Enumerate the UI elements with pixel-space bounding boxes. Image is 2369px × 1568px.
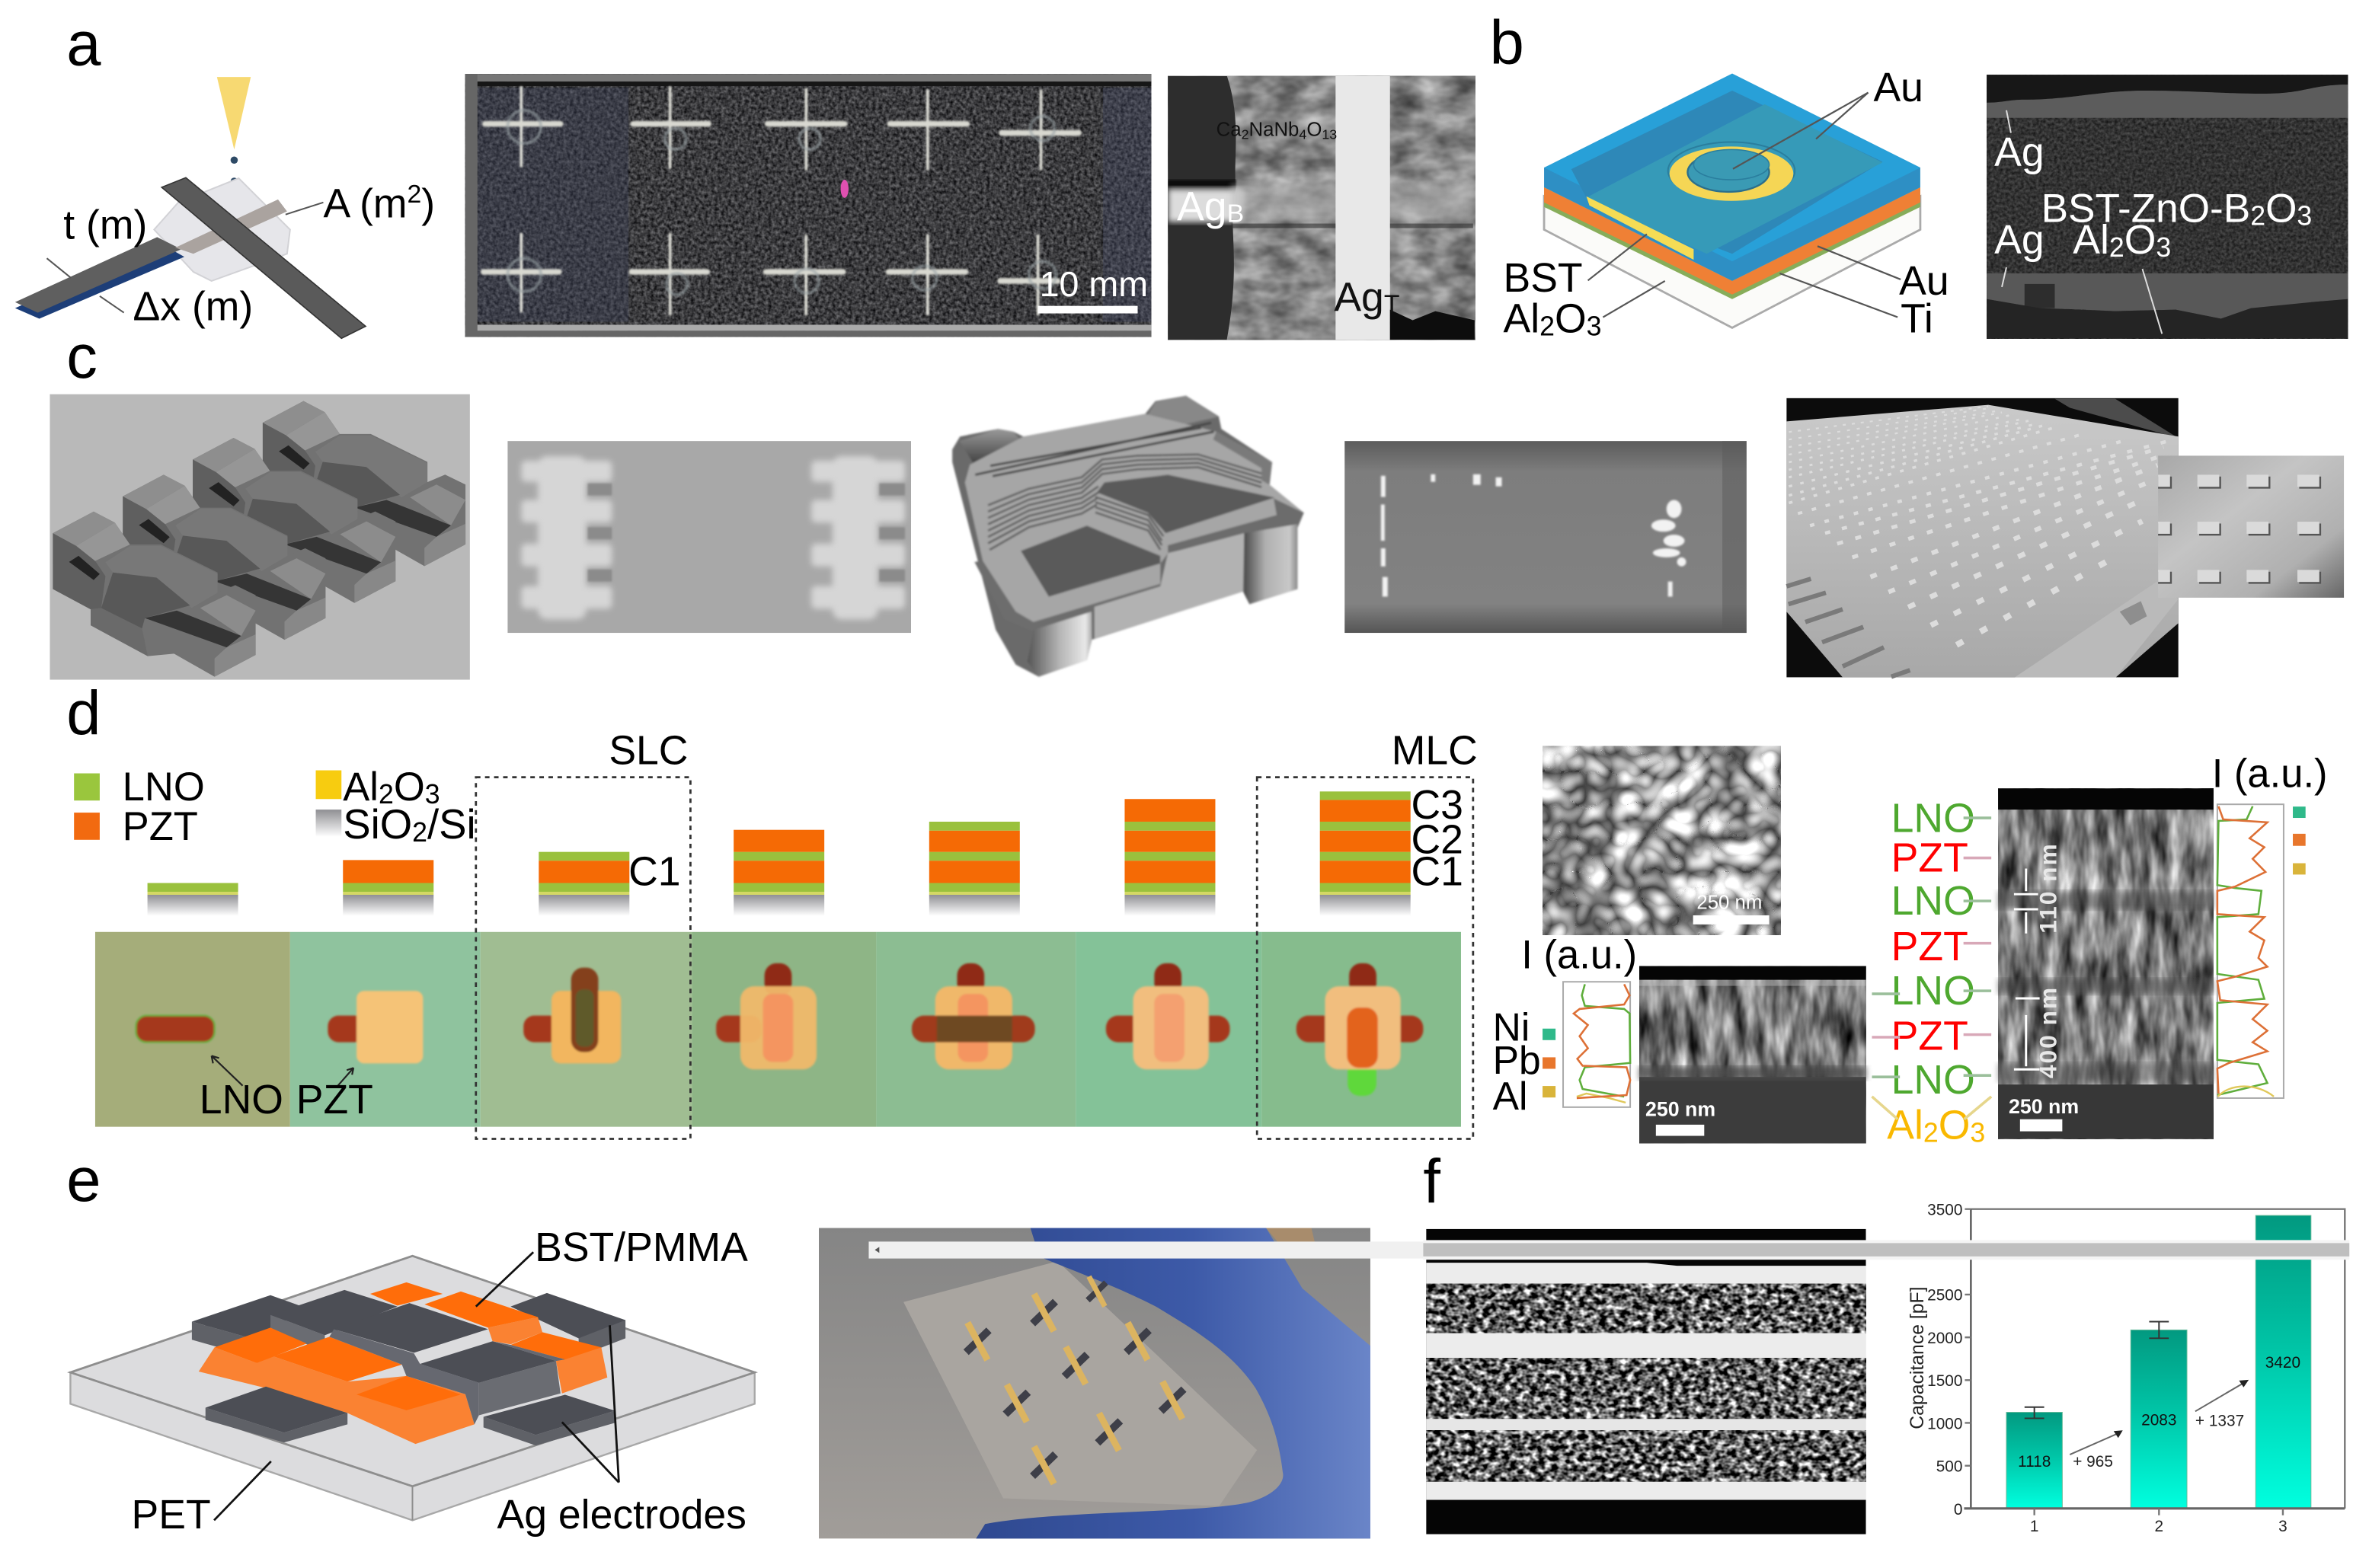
front wall [1095, 533, 1244, 638]
yellow BST strip [1587, 196, 1693, 260]
panel label d: d [66, 679, 101, 748]
layer labels column: PZT [1891, 925, 1968, 969]
x axis tick labels: 3 [2278, 1518, 2287, 1535]
substrate [1544, 196, 1920, 327]
label Al2O3: Al [2073, 218, 2109, 263]
y axis tick labels [1927, 1202, 1962, 1519]
legend swatches right [2293, 806, 2306, 874]
SEM: SLC cross section [1639, 966, 1866, 1143]
bar value labels: 2083 [2141, 1411, 2176, 1429]
label delta x: Δx (m) [133, 284, 253, 329]
legend: SiO [343, 801, 412, 848]
label Ca2NaNb4O13: 13 [1322, 126, 1337, 142]
upper electrode strip [161, 177, 366, 338]
inset close-up [2148, 455, 2344, 598]
legend: /Si [427, 801, 476, 848]
scale bar [1693, 915, 1770, 925]
center electrode [329, 1303, 565, 1424]
lower terminals [1244, 524, 1297, 604]
label Ca2NaNb4O13: NaNb [1249, 120, 1299, 141]
x axis tick labels: 1 [2030, 1518, 2038, 1535]
scale text: 250 nm [1645, 1098, 1715, 1121]
layer labels column [1887, 796, 1985, 1148]
scrollbar overlay [868, 1240, 2349, 1260]
SEM: PZT grains top view [1543, 746, 1781, 935]
legend: Al [343, 765, 379, 810]
device 5 [912, 963, 1035, 1069]
layer labels C3 C2 C1: C3 [1411, 783, 1463, 828]
label PZT: PZT [296, 1078, 373, 1123]
panel c: device photo [1344, 441, 1747, 633]
magenta spot [841, 180, 849, 198]
SLC dashed box [476, 778, 690, 1139]
label Al2O3: O [2124, 218, 2156, 263]
panel label a: a [66, 9, 101, 78]
device 3 [523, 968, 621, 1063]
label Al2O3: 3 [1587, 311, 1602, 341]
layer stack 1 [148, 883, 238, 916]
label BST/PMMA: BST/PMMA [535, 1225, 748, 1270]
label AgB: B [1227, 200, 1244, 228]
label 110 nm: 110 nm [2034, 842, 2061, 934]
arrow PZT [337, 1068, 353, 1086]
connector dashes [1872, 818, 1991, 1119]
layer labels column: PZT [1891, 835, 1968, 880]
y axis tick labels: 2000 [1927, 1330, 1962, 1347]
panel a: laser schematic [15, 77, 435, 338]
label Ag lower: Ag [1994, 218, 2045, 263]
dark electrode floors [1021, 525, 1160, 596]
panel label e: e [66, 1145, 101, 1215]
label Ca2NaNb4O13: 4 [1299, 126, 1306, 142]
label AgT: T [1384, 290, 1399, 319]
SEM: three-layer cross section [1426, 1229, 1866, 1534]
ring [1668, 142, 1795, 200]
back electrodes [192, 1290, 625, 1359]
SEM: Ca2NaNb4O13 cross section [1168, 75, 1475, 340]
MLC dashed box [1257, 778, 1473, 1139]
label BST: BST [1504, 256, 1583, 301]
y axis tick labels: 1000 [1927, 1415, 1962, 1432]
SEM: MLC cross section [1998, 788, 2214, 1139]
layer labels C1: C1 [628, 849, 681, 894]
label AgB: Ag [1177, 185, 1227, 230]
panel c: printed comb electrode photo [507, 441, 911, 633]
label Ca2NaNb4O13: O [1306, 120, 1322, 141]
label MLC: MLC [1392, 729, 1478, 774]
label I (a.u.) left: I (a.u.) [1521, 932, 1637, 977]
device 6 [1106, 963, 1230, 1069]
label t: t (m) [63, 203, 147, 247]
orange top pads [215, 1327, 601, 1410]
panel c: MLCC cutaway render [952, 396, 1304, 677]
photo: printed capacitor array [465, 74, 1151, 337]
icon: laser cone [217, 77, 251, 149]
legend: O [394, 765, 425, 810]
element labels Ni Pb Al [1493, 1005, 1541, 1118]
y axis tick labels: 500 [1936, 1458, 1962, 1476]
legend: 2 [412, 817, 427, 848]
layer stack 7 [1320, 791, 1411, 916]
label BST-ZnO-B2O3: 2 [2250, 201, 2265, 232]
label 400 nm: 400 nm [2034, 986, 2061, 1078]
panel label b: b [1490, 8, 1524, 77]
increase labels: + 1337 [2195, 1412, 2244, 1429]
layer labels column: 2 [1923, 1117, 1939, 1148]
label PET: PET [132, 1493, 211, 1538]
label Al2O3: 3 [2156, 232, 2171, 263]
device 2 [328, 991, 423, 1063]
layer labels C3 C2 C1: C1 [1411, 849, 1463, 894]
label Au lower: Au [1899, 259, 1949, 304]
layer labels column: LNO [1891, 879, 1975, 924]
pointer lines [46, 203, 323, 313]
pointer lines [2002, 110, 2162, 334]
label Ti: Ti [1901, 296, 1933, 341]
device 4 [716, 963, 817, 1069]
scale bar [1038, 306, 1138, 314]
error bars [2025, 1321, 2169, 1418]
bar value labels: 3420 [2265, 1354, 2300, 1372]
panel c: wafer photo [1786, 398, 2344, 677]
arrow 2 [2195, 1380, 2249, 1411]
legend: PZT [123, 804, 198, 849]
label A: A (m [323, 182, 408, 227]
layer labels column: O [1939, 1103, 1970, 1148]
layer stack 3 [539, 852, 629, 916]
EDS profile right [2217, 804, 2284, 1098]
clear substrate block [154, 178, 290, 281]
y axis tick labels: 0 [1954, 1501, 1962, 1519]
dots grid [1789, 407, 2168, 645]
legend: 3 [425, 779, 440, 810]
y axis tick labels: 1500 [1927, 1372, 1962, 1390]
label A: ) [421, 182, 435, 227]
layer stack 5 [929, 822, 1020, 916]
label Al2O3: Al [1504, 296, 1539, 341]
mid layer [175, 200, 287, 254]
flexible sheet [903, 1261, 1257, 1506]
layer labels column: PZT [1891, 1014, 1968, 1059]
bars [2006, 1215, 2311, 1509]
layer labels column: LNO [1891, 1058, 1975, 1103]
label LNO: LNO [200, 1078, 283, 1123]
electrode layers [988, 455, 1261, 550]
legend: LNO [123, 765, 205, 810]
panel c: 3D electrode render [50, 394, 470, 680]
panel e: flexible capacitor schematic [70, 1225, 755, 1538]
y axis tick labels: 2500 [1927, 1287, 1962, 1305]
layer stack 4 [734, 830, 824, 916]
label Ca2NaNb4O13: 2 [1242, 126, 1249, 142]
pointer lines [214, 1252, 619, 1520]
label AgT: Ag [1334, 276, 1384, 321]
axes [1964, 1209, 2345, 1515]
bar value labels [2018, 1354, 2300, 1471]
element labels Ni Pb Al: Ni [1493, 1005, 1530, 1049]
label BST-ZnO-B2O3: 3 [2297, 201, 2312, 232]
legend [74, 771, 473, 841]
layer labels column: LNO [1891, 796, 1975, 841]
optical micrographs strip [95, 932, 1461, 1127]
element labels Ni Pb Al: Al [1493, 1074, 1527, 1118]
increase labels: + 965 [2073, 1453, 2113, 1471]
PET substrate [70, 1372, 755, 1520]
increase labels [2073, 1412, 2244, 1471]
layer stack 2 [343, 860, 433, 916]
glove [976, 1228, 1370, 1538]
label Al2O3: 2 [2109, 232, 2124, 263]
device 1 [136, 1016, 215, 1043]
label BST-ZnO-B2O3: BST-ZnO-B [2041, 187, 2250, 232]
layer labels column: LNO [1891, 969, 1975, 1014]
pointer lines [1588, 93, 1901, 318]
blue top plate [1544, 74, 1920, 281]
panel label c: c [66, 322, 98, 391]
scale bar [1656, 1125, 1704, 1136]
edge slots [1786, 579, 1910, 677]
legend: 2 [379, 779, 394, 810]
SEM: BST-ZnO-B2O3 cross section [1987, 75, 2348, 339]
orange side walls [199, 1347, 475, 1444]
label I (a.u.) right: I (a.u.) [2212, 751, 2328, 796]
bar chart: capacitance [1907, 1202, 2345, 1535]
label Al2O3: 2 [1539, 311, 1555, 341]
right electrode [420, 1341, 561, 1415]
EDS profile left [1563, 982, 1630, 1107]
layer stack 6 [1124, 799, 1215, 916]
lower electrode strip [15, 237, 184, 319]
label Ag: Ag [1994, 130, 2045, 175]
layer labels C3 C2 C1: C2 [1411, 818, 1463, 863]
y axis title: Capacitance [pF] [1907, 1286, 1928, 1429]
panel label f: f [1423, 1147, 1440, 1216]
front electrodes [206, 1387, 615, 1445]
scale text: 250 nm [2009, 1095, 2079, 1118]
layer labels C3 C2 C1 [1411, 783, 1463, 894]
element labels Ni Pb Al: Pb [1493, 1038, 1541, 1082]
scale bar [2020, 1119, 2062, 1132]
panel b: device schematic [1504, 65, 1949, 341]
arrow LNO [212, 1055, 243, 1086]
label Ca2NaNb4O13: Ca [1216, 120, 1242, 141]
device 7 [1296, 963, 1423, 1096]
orange layer [1544, 187, 1920, 295]
label Al2O3: O [1555, 296, 1587, 341]
scale text: 250 nm [1696, 893, 1762, 914]
y axis tick labels: 3500 [1927, 1202, 1962, 1219]
chips [964, 1276, 1187, 1485]
label SLC: SLC [609, 729, 688, 774]
legend swatches left [1543, 1029, 1555, 1097]
layer labels column: 3 [1970, 1117, 1985, 1148]
dimension arrows [2014, 868, 2040, 1069]
label Au top: Au [1873, 65, 1923, 110]
label Ag electrodes: Ag electrodes [497, 1493, 747, 1538]
label BST-ZnO-B2O3: O [2265, 187, 2297, 232]
green layer [1544, 187, 1920, 299]
crosses [484, 88, 1079, 315]
orange back pads [370, 1282, 542, 1344]
arrow 1 [2070, 1430, 2123, 1455]
layer labels column: Al [1887, 1103, 1923, 1148]
bar value labels: 1118 [2018, 1453, 2051, 1471]
inner teal electrode [1586, 104, 1882, 254]
photo: flexible device in gloved hand [819, 1228, 1370, 1538]
x axis tick labels: 2 [2155, 1518, 2163, 1535]
icon: droplets [231, 156, 238, 185]
x axis tick labels [2030, 1518, 2287, 1535]
label A: 2 [408, 180, 421, 209]
scale text: 10 mm [1040, 264, 1148, 304]
